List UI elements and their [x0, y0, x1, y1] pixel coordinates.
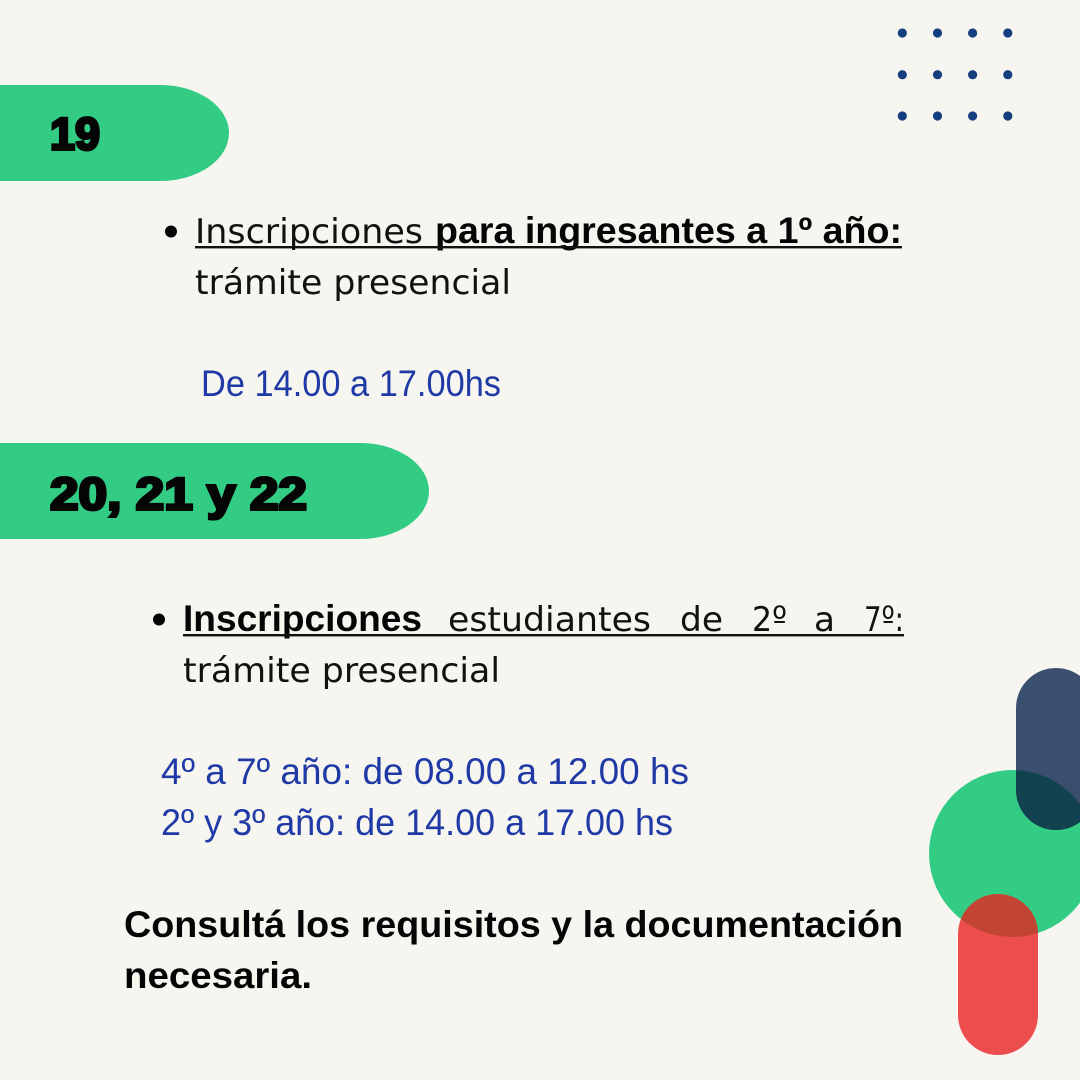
section 20-22: enrolment for students of years 2 to 7: 2º	[752, 600, 787, 640]
closing note: Consultá los requisitos y la documentación	[124, 904, 903, 945]
section 19: enrolment for first-year students	[165, 210, 902, 303]
schedule by year: 2º y 3º año: de 14.00 a 17.00 hs	[161, 802, 673, 843]
section 20-22: enrolment for students of years 2 to 7: trámite presencial	[183, 651, 500, 691]
schedule by year	[161, 751, 689, 843]
decorative shapes: circle and pills	[929, 668, 1080, 1055]
section 19: enrolment for first-year students: trámite presencial	[195, 263, 511, 303]
closing note: necesaria.	[124, 955, 312, 996]
date badge: 19	[0, 85, 229, 181]
schedule: 14.00 to 17.00: De 14.00 a 17.00hs	[201, 363, 501, 404]
section 20-22: enrolment for students of years 2 to 7	[153, 598, 904, 691]
dot grid decoration	[898, 28, 1012, 121]
closing note	[124, 904, 903, 996]
section 20-22: enrolment for students of years 2 to 7: 7º:	[864, 600, 904, 640]
section 20-22: enrolment for students of years 2 to 7: Inscripciones	[183, 598, 422, 639]
section 19: enrolment for first-year students: para ingresantes a 1º año:	[435, 210, 902, 251]
schedule by year: 4º a 7º año: de 08.00 a 12.00 hs	[161, 751, 689, 792]
section 20-22: enrolment for students of years 2 to 7: a	[814, 600, 835, 640]
section 19: enrolment for first-year students: Inscripciones	[195, 212, 423, 252]
section 20-22: enrolment for students of years 2 to 7: de	[680, 600, 723, 640]
section 20-22: enrolment for students of years 2 to 7: estudiantes	[448, 600, 651, 640]
date badge: 19: 19	[50, 108, 100, 160]
date badge: 20, 21 y 22	[0, 443, 429, 539]
date badge: 20, 21 y 22: 20, 21 y 22	[50, 468, 307, 520]
